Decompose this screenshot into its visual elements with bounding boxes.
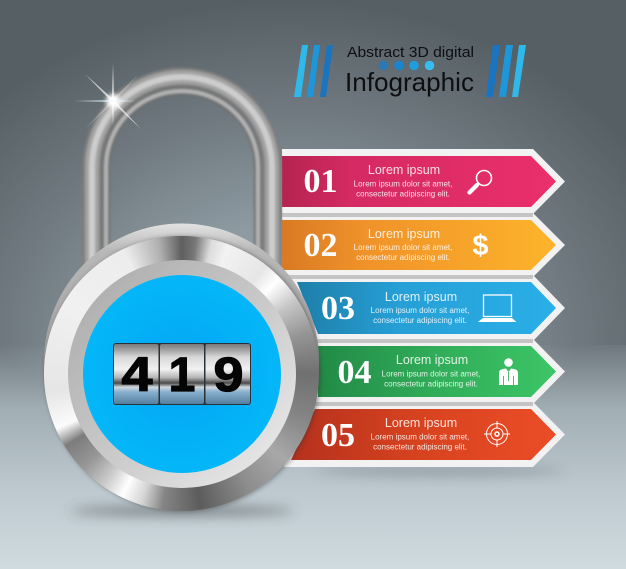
text block 05 — [371, 416, 469, 452]
icon: dollar: $ — [472, 230, 489, 262]
text block 01: consectetur adipiscing elit. — [356, 190, 450, 198]
text block 04: Lorem ipsum dolor sit amet, — [382, 370, 480, 378]
number 01: 01 — [304, 163, 338, 200]
right slashes — [486, 45, 526, 97]
text block 02: Lorem ipsum — [368, 227, 440, 241]
blue dial — [83, 275, 281, 473]
wheel 1: 1 — [169, 349, 195, 402]
number 02: 02 — [304, 227, 338, 264]
padlock — [44, 77, 321, 516]
shackle — [92, 77, 272, 275]
heading: Abstract 3D digital: Abstract 3D digital — [347, 45, 474, 61]
text block 05: Lorem ipsum dolor sit amet, — [371, 432, 469, 442]
icon: person — [499, 358, 518, 385]
icon: sparkle — [74, 63, 141, 129]
text block 03: consectetur adipiscing elit. — [373, 316, 467, 325]
lock shadow on ribbons — [45, 236, 321, 512]
text block 04: Lorem ipsum — [396, 353, 468, 367]
panel: ribbon 05 — [284, 402, 565, 467]
lock body back — [44, 224, 319, 498]
text block 02 — [354, 227, 452, 262]
inner band — [68, 260, 296, 488]
number 04: 04 — [338, 354, 372, 391]
text block 04 — [382, 353, 480, 388]
lock shadow — [70, 506, 294, 516]
title block — [294, 45, 526, 97]
text block 02: Lorem ipsum dolor sit amet, — [354, 243, 452, 252]
combination counter — [113, 343, 251, 405]
text block 05: consectetur adipiscing elit. — [373, 442, 467, 452]
number 05: 05 — [321, 417, 355, 454]
number 03: 03 — [321, 290, 355, 327]
panel: ribbon 03 — [282, 275, 565, 341]
icon: laptop — [478, 295, 516, 322]
text block 03 — [371, 290, 469, 325]
wheel 9: 9 — [214, 349, 244, 402]
icon: target — [484, 421, 510, 447]
heading: Infographic: Infographic — [345, 67, 474, 97]
text block 03: Lorem ipsum dolor sit amet, — [371, 306, 469, 315]
panel: ribbon 02 — [282, 213, 565, 277]
text block 01: Lorem ipsum — [368, 163, 440, 177]
panel: ribbon 04 — [300, 339, 565, 404]
text block 01 — [354, 163, 452, 198]
title dots — [379, 61, 434, 70]
metal ring — [44, 236, 319, 511]
icon: magnifier — [470, 170, 492, 192]
text block 04: consectetur adipiscing elit. — [384, 380, 478, 388]
text block 03: Lorem ipsum — [385, 290, 457, 304]
wheel 4: 4 — [122, 349, 153, 402]
text block 02: consectetur adipiscing elit. — [356, 253, 450, 262]
text block 05: Lorem ipsum — [385, 416, 457, 430]
shadow under ribbons — [315, 467, 565, 475]
text block 01: Lorem ipsum dolor sit amet, — [354, 180, 452, 188]
left slashes — [294, 45, 333, 97]
panel: ribbon 01 — [282, 149, 565, 214]
